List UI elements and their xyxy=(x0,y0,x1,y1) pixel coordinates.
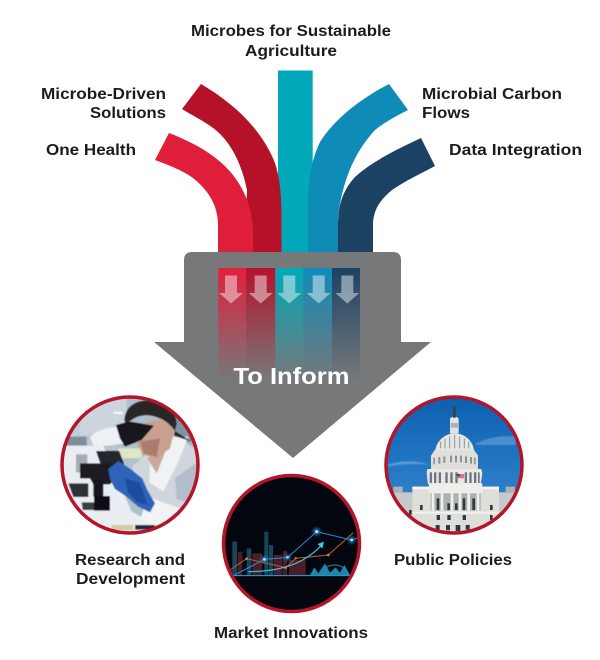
heading label: Microbes for Sustainable Agriculture: Microbes for Sustainable xyxy=(191,23,391,40)
caption: Public Policies: Public Policies xyxy=(394,552,512,569)
strip: navy xyxy=(332,268,360,380)
table items xyxy=(135,525,155,530)
strip: red xyxy=(218,268,246,380)
arrow text: To Inform: To Inform xyxy=(234,363,350,389)
blue line xyxy=(233,532,358,576)
microscope body xyxy=(64,444,158,532)
orange line xyxy=(230,533,353,570)
nodes xyxy=(263,530,353,561)
microscope head xyxy=(90,427,124,446)
heading label: Microbial Carbon Flows xyxy=(422,86,562,122)
heading label: Microbes for Sustainable Agriculture: Agriculture xyxy=(245,43,337,60)
icon: down arrow 5 xyxy=(335,276,359,304)
big grey arrow xyxy=(154,252,431,458)
heading label: Microbial Carbon Flows: Microbial Carbon xyxy=(422,86,562,103)
coat xyxy=(132,435,196,519)
strand: teal xyxy=(278,70,313,252)
photo circle: market chart xyxy=(222,474,362,614)
flag xyxy=(457,474,464,478)
bars xyxy=(232,532,273,575)
heading label: Microbe-Driven Solutions: Solutions xyxy=(90,105,166,122)
heading label: Microbe-Driven Solutions: Microbe-Driven xyxy=(41,86,166,103)
caption: Market Innovations: Market Innovations xyxy=(214,625,368,642)
heading label: Microbes for Sustainable Agriculture xyxy=(191,23,391,60)
photo circle: research lab xyxy=(60,395,200,538)
microscope mechanism xyxy=(96,451,124,464)
drum xyxy=(427,469,482,484)
upper drum xyxy=(431,450,478,469)
icon: down arrow 3 xyxy=(277,276,301,304)
cyan growth arrow xyxy=(248,545,322,572)
wings xyxy=(394,492,514,516)
strand: navy xyxy=(338,138,435,252)
strand: dark red xyxy=(182,84,282,252)
baseline xyxy=(233,575,350,576)
icon: down arrow 2 xyxy=(249,276,273,304)
caption: Research and Development xyxy=(75,552,186,588)
strip: blue xyxy=(303,268,332,380)
strip: teal xyxy=(275,268,303,380)
strand: red xyxy=(155,133,253,252)
photo circle: capitol building xyxy=(384,395,524,537)
fading colour strips with down arrows xyxy=(218,268,360,380)
strand bundle flowing into arrow xyxy=(155,70,435,252)
heading label: Microbe-Driven Solutions xyxy=(41,86,166,122)
heading label: Microbial Carbon Flows: Flows xyxy=(422,105,470,122)
glove xyxy=(108,461,155,512)
dome xyxy=(435,433,474,450)
icon: down arrow 1 xyxy=(219,276,243,304)
caption: Research and Development: Development xyxy=(76,571,186,588)
face and neck xyxy=(136,417,175,458)
icon: down arrow 4 xyxy=(307,276,331,304)
hair xyxy=(124,400,192,442)
peaks xyxy=(310,563,350,575)
node glows xyxy=(261,528,355,562)
central block xyxy=(412,487,499,533)
strip: dark red xyxy=(246,268,275,380)
strand: blue xyxy=(308,84,408,252)
heading label: Data Integration: Data Integration xyxy=(449,142,582,159)
caption: Research and Development: Research and xyxy=(75,552,185,569)
heading label: One Health: One Health xyxy=(46,142,136,159)
